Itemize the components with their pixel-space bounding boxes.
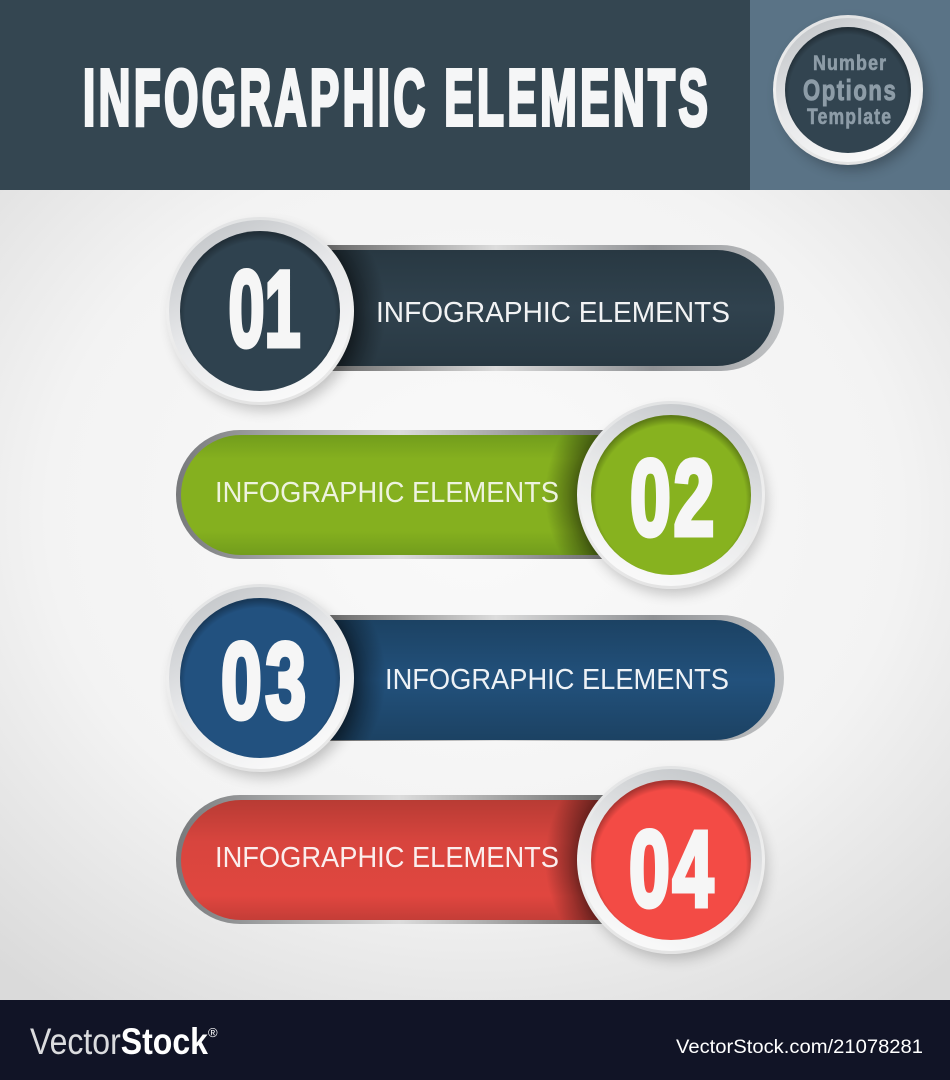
badge: number options template: Options xyxy=(803,75,896,107)
number circle 01: 01 xyxy=(228,248,301,369)
bar 04 xyxy=(176,795,603,924)
background xyxy=(0,190,950,1000)
number circle 03: 03 xyxy=(221,620,309,741)
title: INFOGRAPHIC ELEMENTS xyxy=(83,53,708,142)
label 02: INFOGRAPHIC ELEMENTS xyxy=(215,477,559,509)
number circle 04: 04 xyxy=(629,808,716,929)
footer url: VectorStock.com/21078281 xyxy=(676,1037,923,1058)
label 04: INFOGRAPHIC ELEMENTS xyxy=(215,842,559,874)
badge: number options template: Number xyxy=(813,52,886,75)
number circle 04 xyxy=(577,766,766,959)
badge: number options template xyxy=(773,15,926,169)
bar 02 xyxy=(176,430,603,559)
label 01: INFOGRAPHIC ELEMENTS xyxy=(376,297,730,329)
item 01 xyxy=(166,217,784,416)
number circle 01 xyxy=(166,217,357,410)
item 02 xyxy=(176,401,772,600)
badge: number options template: Template xyxy=(807,105,891,130)
number circle 02: 02 xyxy=(630,437,717,558)
bar 03 xyxy=(330,615,784,741)
number circle 02 xyxy=(577,401,766,594)
footer logo: VectorStock xyxy=(30,1021,208,1062)
label 03: INFOGRAPHIC ELEMENTS xyxy=(385,664,729,696)
item 03 xyxy=(166,584,784,784)
registered mark: ® xyxy=(208,1025,218,1040)
number circle 03 xyxy=(166,584,357,777)
bar 01 xyxy=(327,245,784,371)
header banner xyxy=(0,0,950,190)
item 04 xyxy=(176,766,772,966)
footer xyxy=(0,1000,950,1080)
